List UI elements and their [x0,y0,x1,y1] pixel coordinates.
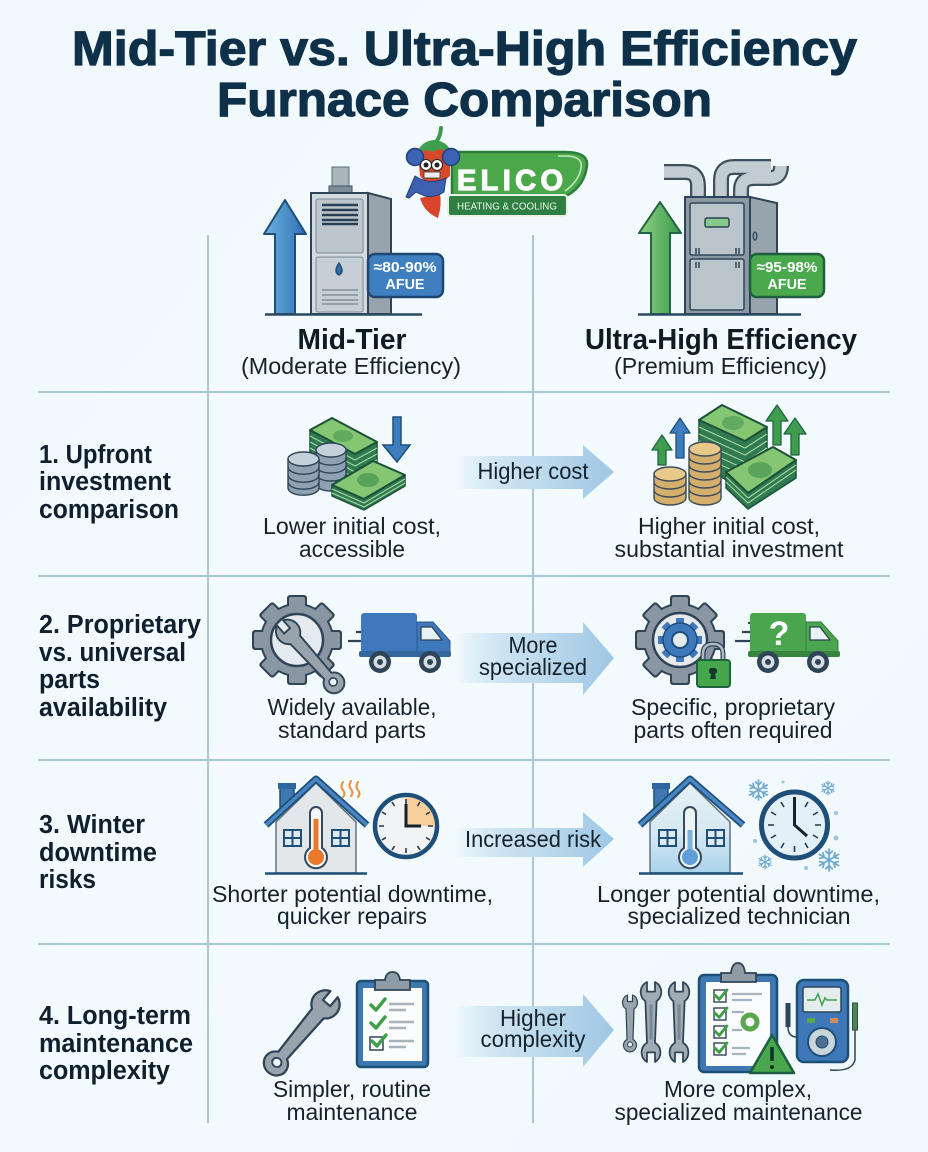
icon: money stacks and coins, high cost [652,405,806,509]
icon: gear with blue cog and padlock [635,595,730,687]
arrow: increased risk [454,812,614,867]
icon: wrenches [623,982,689,1062]
text: mid-tier downtime [212,881,493,929]
row label [39,441,179,524]
icon: multimeter [786,980,858,1070]
text: mid-tier maintenance: Simpler, routine [273,1076,431,1102]
icon: green delivery truck with question mark: ? [769,615,789,653]
text: ultra-high maintenance: More complex, [664,1076,812,1102]
text: mid-tier maintenance: maintenance [286,1099,418,1125]
row label: 1. Upfront [39,441,152,469]
text: ultra-high maintenance [614,1076,862,1125]
arrow: higher complexity: complexity [480,1026,586,1052]
text: ultra-high downtime: specialized technician [628,903,850,929]
icon: blue efficiency arrow [264,200,306,314]
text: ultra-high parts: parts often required [634,717,832,743]
heading: Mid-Tier: (Moderate Efficiency) [241,353,461,379]
heading: Ultra-High Efficiency: Ultra-High Efficiency [585,324,857,356]
icon: gear with wrench [252,595,350,699]
row label: availability [39,694,168,722]
arrow: higher cost: Higher cost [478,458,589,484]
heading: Mid-Tier: Mid-Tier [298,324,406,356]
arrow: more specialized: specialized [479,654,587,680]
row label: maintenance [39,1030,193,1058]
row label: 4. Long-term [39,1002,191,1030]
row label: investment [39,468,171,496]
icon: cold house with thermometer [639,779,743,874]
icon: detailed checklist with warning [699,963,794,1073]
text: mid-tier cost: accessible [299,536,405,562]
icon: green efficiency arrow [639,202,681,314]
badge: 80-90% AFUE [368,254,443,297]
heading: Ultra-High Efficiency [585,324,857,379]
icon: ultra-high furnace with vent pipes [664,166,781,314]
arrow: more specialized [454,622,614,695]
text: ultra-high maintenance: specialized maintenance [614,1099,862,1125]
arrow: higher cost [454,445,614,499]
arrow: higher complexity [454,994,614,1067]
text: ultra-high parts [631,694,836,743]
text: mid-tier cost [263,513,441,562]
text: ultra-high parts: Specific, proprietary [631,694,836,720]
icon: blue delivery truck [348,613,451,673]
text: ultra-high cost: Higher initial cost, [638,513,820,539]
badge: 95-98% AFUE [750,254,824,297]
title [72,23,857,127]
icon: green delivery truck with question mark [735,613,840,673]
icon: clipboard checklist [357,972,428,1067]
badge: 80-90% AFUE: ≈80-90% [374,259,436,276]
panel: mid-tier furnace header [241,167,461,379]
row label: risks [39,866,96,894]
icon: down arrow [383,417,410,462]
row 2: parts availability [39,595,840,743]
row label [39,1002,193,1085]
icon: warm house with thermometer [265,779,367,874]
row 1: upfront investment [39,405,844,562]
row label: parts [39,666,100,694]
icon: mid-tier furnace [311,167,391,314]
logo: Elico Heating & Cooling: ELICO [457,165,563,197]
text: ultra-high downtime [597,881,880,929]
row label: 2. Proprietary [39,611,202,639]
row label: 3. Winter [39,811,145,839]
badge: 95-98% AFUE: AFUE [768,276,806,293]
row label [39,811,157,894]
text: ultra-high cost: substantial investment [614,536,844,562]
title: Mid-Tier vs. Ultra-High Efficiency [72,23,857,76]
text: mid-tier cost: Lower initial cost, [263,513,441,539]
row label: downtime [39,839,157,867]
icon: long clock and snowflakes [748,780,840,871]
arrow: increased risk: Increased risk [465,826,601,852]
badge: 80-90% AFUE: AFUE [386,276,424,293]
row label: vs. universal [39,639,186,667]
text: mid-tier parts: standard parts [278,717,426,743]
icon: short clock [375,795,437,857]
row label: comparison [39,496,179,524]
text: mid-tier parts: Widely available, [268,694,436,720]
heading: Mid-Tier [241,324,461,379]
text: mid-tier maintenance [273,1076,431,1125]
icon: money and coins, low cost [288,418,405,510]
text: ultra-high downtime: Longer potential downtime, [597,881,880,907]
row 4: maintenance complexity [39,963,862,1125]
heading: Ultra-High Efficiency: (Premium Efficiency) [614,353,827,379]
row 3: winter downtime [39,779,880,929]
text: mid-tier downtime: Shorter potential downtime, [212,881,493,907]
text: mid-tier downtime: quicker repairs [277,903,427,929]
arrow: higher complexity: Higher [500,1005,566,1031]
row label: complexity [39,1057,171,1085]
logo: Elico Heating & Cooling: HEATING & COOLING [457,200,557,212]
arrow: more specialized: More [508,632,558,658]
icon: wrench [258,985,345,1082]
logo: Elico Heating & Cooling [406,128,587,218]
badge: 95-98% AFUE: ≈95-98% [756,259,818,276]
panel: ultra-high furnace header [585,166,857,379]
title: Furnace Comparison [217,74,712,127]
text: ultra-high cost [614,513,844,562]
row label [39,611,202,722]
text: mid-tier parts [268,694,436,743]
